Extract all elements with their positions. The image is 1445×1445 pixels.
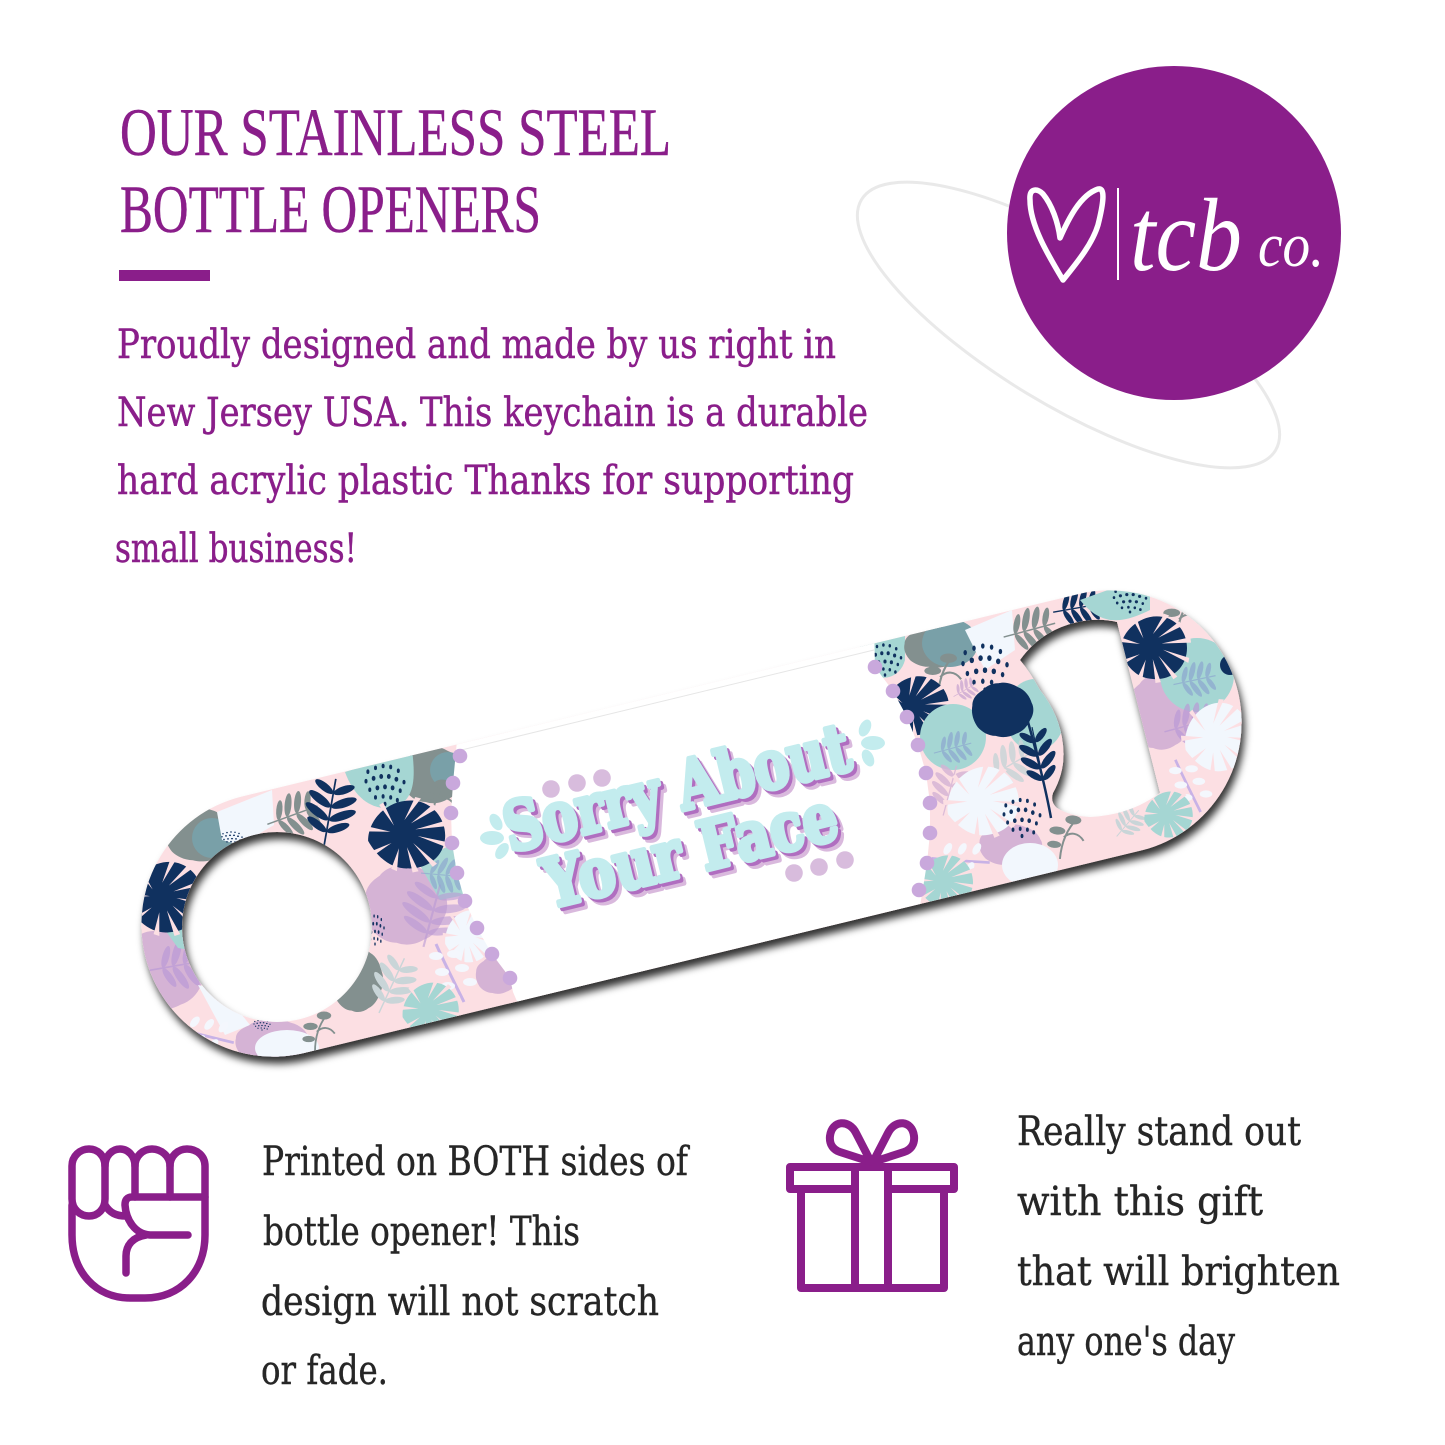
decorative logo orbit ellipse bbox=[820, 131, 1317, 519]
dotted border left bbox=[444, 749, 517, 985]
icon: fist bbox=[72, 1149, 205, 1298]
feature text: printed on both sides: bottle opener! This bbox=[263, 1209, 580, 1255]
title bbox=[120, 94, 671, 247]
intro text block: New Jersey USA. This keychain is a durable bbox=[117, 390, 868, 436]
logo wordmark co.: co. bbox=[1258, 212, 1324, 280]
title: OUR STAINLESS STEEL bbox=[120, 94, 671, 170]
feature text: really stand out: Really stand out bbox=[1017, 1109, 1301, 1155]
title underline bbox=[119, 270, 210, 281]
slogan: Sorry About Your Face: Your Face bbox=[534, 776, 845, 924]
feature text: printed on both sides: Printed on BOTH sides of bbox=[262, 1139, 691, 1185]
logo wordmark tcb: tcb bbox=[1130, 178, 1242, 293]
slogan: Sorry About Your Face: Your Face bbox=[540, 782, 851, 930]
slogan: Sorry About Your Face bbox=[495, 708, 864, 930]
floral pattern left end bbox=[142, 748, 512, 1057]
feature text: really stand out bbox=[1017, 1109, 1340, 1365]
white center label bbox=[451, 625, 930, 1020]
title: BOTTLE OPENERS bbox=[120, 171, 541, 247]
floral pattern right end bbox=[860, 590, 1242, 902]
intro text block bbox=[115, 322, 868, 572]
feature text: really stand out: with this gift bbox=[1017, 1179, 1263, 1225]
feature text: printed on both sides: design will not scratch bbox=[261, 1279, 659, 1325]
decorative dots below slogan bbox=[785, 851, 854, 882]
logo divider bbox=[1117, 188, 1119, 280]
slogan: Sorry About Your Face: Sorry About bbox=[498, 711, 861, 871]
splash right bbox=[856, 718, 885, 768]
splash left bbox=[480, 811, 512, 862]
intro text block: small business! bbox=[115, 526, 357, 572]
decorative dots above slogan bbox=[542, 769, 611, 798]
icon: gift box bbox=[790, 1123, 954, 1288]
feature text: printed on both sides bbox=[261, 1139, 691, 1394]
opener body with shadow bbox=[141, 590, 1242, 1057]
feature text: really stand out: any one's day bbox=[1017, 1319, 1235, 1365]
dotted border right bbox=[868, 660, 937, 897]
intro text block: Proudly designed and made by us right in bbox=[117, 322, 836, 368]
slogan: Sorry About Your Face: Sorry About bbox=[501, 714, 864, 874]
intro text block: hard acrylic plastic Thanks for supporting bbox=[117, 458, 854, 504]
logo badge: tcb co. bbox=[1007, 66, 1341, 400]
bottle opener product bbox=[116, 575, 1257, 1067]
feature text: printed on both sides: or fade. bbox=[261, 1348, 388, 1394]
floral pattern and white label, clipped to opener bbox=[116, 575, 1257, 1067]
icon: logo heart bbox=[1030, 189, 1103, 280]
slogan: Sorry About Your Face: Sorry About bbox=[495, 708, 858, 868]
feature text: really stand out: that will brighten bbox=[1017, 1249, 1340, 1295]
slogan: Sorry About Your Face: Your Face bbox=[537, 779, 848, 927]
